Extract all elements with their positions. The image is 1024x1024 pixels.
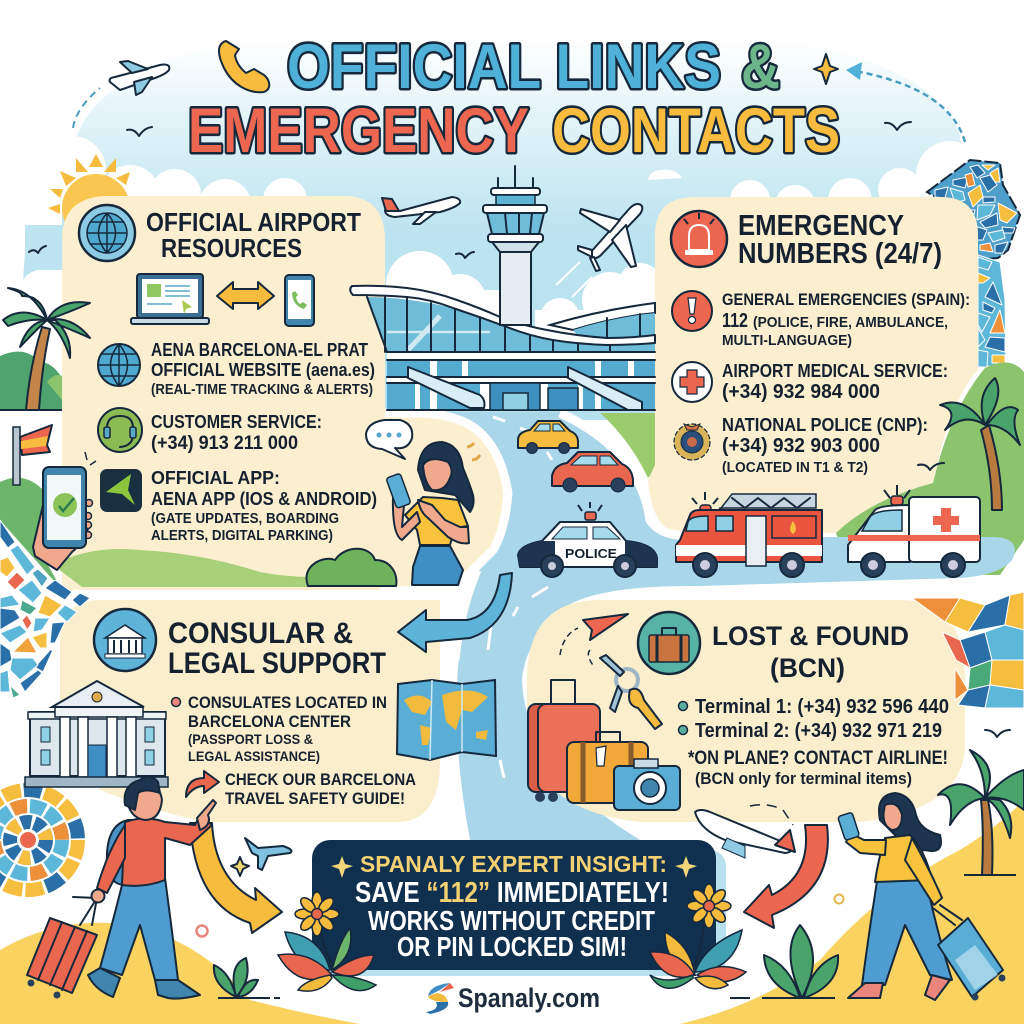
arrow: blue bbox=[398, 573, 512, 652]
heading: EMERGENCY bbox=[738, 210, 904, 242]
text: national police: NATIONAL POLICE (CNP): bbox=[722, 415, 928, 435]
icon: camera bbox=[614, 759, 680, 810]
text: check guide: CHECK OUR BARCELONA bbox=[225, 770, 416, 789]
logo: spanaly bbox=[426, 983, 600, 1014]
icon: orange suitcase bbox=[567, 732, 648, 803]
legs bbox=[100, 878, 178, 980]
illustration: woman with phone bbox=[386, 442, 480, 585]
icon: siren bbox=[671, 211, 727, 267]
bush bbox=[306, 549, 396, 586]
green wedge bbox=[600, 413, 655, 478]
icon: police car: POLICE bbox=[565, 546, 617, 561]
text: general emergencies: (POLICE, FIRE, AMBULANCE, bbox=[753, 314, 948, 331]
icon: speech bubble bbox=[366, 420, 412, 459]
icon: plane left of tower bbox=[382, 197, 460, 224]
phone bbox=[386, 473, 411, 508]
text: website: (REAL-TIME TRACKING & ALERTS) bbox=[151, 381, 373, 398]
sand: bottom right bbox=[680, 800, 1024, 1024]
text: customer service: (+34) 913 211 000 bbox=[151, 433, 298, 454]
bird near right palm bbox=[918, 463, 944, 470]
text: check guide bbox=[225, 770, 416, 808]
text: terminal numbers: Terminal 1: (+34) 932 596 440 bbox=[695, 696, 949, 718]
face bbox=[423, 459, 452, 490]
illustration: airport terminal bbox=[350, 286, 655, 410]
shirt bbox=[405, 497, 468, 545]
mosaic: right strip bbox=[978, 255, 1006, 367]
text: logo: Spanaly.com bbox=[458, 983, 600, 1013]
text: general emergencies bbox=[722, 290, 970, 349]
icon: exclamation bbox=[672, 291, 712, 331]
callout text: SAVE “112” IMMEDIATELY! bbox=[355, 877, 669, 909]
callout backing bbox=[324, 850, 726, 976]
illustration: right flower bbox=[650, 884, 746, 989]
icon: suitcase bbox=[638, 612, 700, 674]
icon: aena app bbox=[100, 469, 142, 512]
icon: small plane bbox=[110, 61, 169, 95]
torso bbox=[875, 835, 932, 882]
hair bbox=[879, 793, 941, 851]
icon: plane right of tower bbox=[556, 204, 642, 297]
ring decoration bbox=[196, 926, 208, 936]
arrow: yellow bbox=[190, 823, 282, 933]
icon: sparkle bbox=[814, 54, 838, 84]
text: website: OFFICIAL WEBSITE (aena.es) bbox=[151, 360, 375, 380]
text: terminal numbers: Terminal 2: (+34) 932 971 219 bbox=[695, 720, 942, 742]
text: consulates bbox=[188, 693, 387, 764]
text: national police: (+34) 932 903 000 bbox=[722, 435, 880, 457]
text: on plane note: *ON PLANE? CONTACT AIRLINE! bbox=[688, 748, 948, 769]
title: OFFICIAL LINKS bbox=[287, 31, 721, 102]
illustration: small blue plane bbox=[245, 838, 291, 870]
icon: headset bbox=[98, 408, 142, 452]
illustration: control tower bbox=[483, 166, 547, 325]
icon: red car bbox=[552, 452, 633, 492]
callout text: WORKS WITHOUT CREDIT bbox=[368, 905, 655, 936]
panel: consular background bbox=[60, 600, 440, 822]
meadow in resources panel bbox=[53, 549, 400, 587]
title: & bbox=[741, 31, 780, 102]
text: official app: ALERTS, DIGITAL PARKING) bbox=[151, 527, 333, 544]
panel: consular and legal support bbox=[25, 609, 496, 808]
rear hand bbox=[92, 890, 104, 902]
torso and arm bbox=[122, 815, 212, 886]
illustration: left flower bbox=[278, 892, 376, 991]
panel: lost and found background bbox=[527, 600, 965, 822]
icon: sparkle left bbox=[331, 856, 353, 878]
icon: flag bbox=[13, 425, 52, 485]
icon: world map bbox=[397, 680, 496, 760]
text: official app: AENA APP (IOS & ANDROID) bbox=[151, 489, 377, 509]
arm holding phone bbox=[393, 497, 420, 540]
icon: globe heading bbox=[79, 205, 135, 261]
legs bbox=[862, 875, 952, 985]
text: consulates: (PASSPORT LOSS & bbox=[188, 731, 313, 747]
bird bbox=[985, 730, 1010, 737]
text: website: AENA BARCELONA-EL PRAT bbox=[151, 340, 368, 360]
callout heading: SPANALY EXPERT INSIGHT: bbox=[360, 851, 667, 877]
text: general emergencies: MULTI-LANGUAGE) bbox=[722, 332, 852, 349]
icon: keys bbox=[600, 655, 662, 729]
icon: red luggage bbox=[528, 680, 600, 802]
decorative title arrows and birds bbox=[73, 62, 965, 258]
text: check guide: TRAVEL SAFETY GUIDE! bbox=[225, 789, 405, 808]
arm to suitcase bbox=[905, 838, 942, 905]
mosaic: left disc bbox=[0, 790, 78, 890]
text: on plane note bbox=[688, 748, 948, 788]
text: national police: (LOCATED IN T1 & T2) bbox=[722, 460, 868, 476]
icon: paper plane bbox=[560, 614, 628, 668]
icon: fire truck bbox=[676, 492, 822, 577]
icon: bank bbox=[94, 609, 156, 671]
heading: LEGAL SUPPORT bbox=[168, 647, 386, 680]
illustration: consulate building bbox=[25, 681, 168, 787]
icon: medical cross bbox=[672, 362, 712, 402]
illustration: walking woman with blue suitcase bbox=[834, 793, 1006, 1000]
text: national police bbox=[722, 415, 928, 476]
illustration: walking man with red suitcase bbox=[27, 776, 216, 999]
panel: emergency numbers bbox=[671, 210, 970, 476]
icon: phone bbox=[285, 275, 314, 326]
text: general emergencies: GENERAL EMERGENCIES (SPAIN): bbox=[722, 290, 970, 309]
illustration: left palm bbox=[3, 288, 90, 410]
small key decoration bbox=[834, 894, 844, 904]
heading bbox=[712, 621, 909, 683]
title: EMERGENCY bbox=[188, 95, 529, 166]
hair bbox=[418, 442, 474, 512]
text: consulates: LEGAL ASSISTANCE) bbox=[188, 748, 320, 764]
hand pointing bbox=[197, 800, 216, 830]
bullet bbox=[172, 698, 180, 706]
backpack bbox=[107, 820, 150, 885]
arm pointing bbox=[418, 500, 469, 543]
heading: RESOURCES bbox=[161, 233, 302, 263]
icon: double arrow bbox=[217, 282, 274, 309]
jeans bbox=[412, 546, 463, 585]
road bbox=[425, 412, 1015, 840]
illustration: right palm bbox=[940, 378, 1020, 510]
text: general emergencies: 112 bbox=[722, 310, 748, 332]
icon: title phone bbox=[219, 41, 269, 92]
heading: (BCN) bbox=[770, 653, 845, 683]
callout text: OR PIN LOCKED SIM! bbox=[397, 931, 627, 962]
left sky patch with bird bbox=[23, 226, 62, 280]
panel: official airport resources bbox=[79, 205, 377, 544]
arrow: red bbox=[744, 825, 828, 928]
icon: ambulance bbox=[848, 485, 980, 577]
text: official app: (GATE UPDATES, BOARDING bbox=[151, 510, 339, 527]
icon: red arrow bbox=[186, 771, 219, 797]
bullets bbox=[678, 702, 688, 734]
blue suitcase bbox=[933, 905, 1006, 1000]
phone bbox=[838, 812, 860, 841]
panel: official airport resources background bbox=[62, 196, 508, 590]
clouds bbox=[0, 120, 1024, 420]
heading bbox=[168, 617, 386, 680]
icon: globe website bbox=[98, 344, 140, 386]
left hills bbox=[0, 352, 62, 410]
icon: laptop bbox=[131, 274, 209, 324]
sand: bottom left bbox=[0, 923, 360, 1024]
mosaic: left bbox=[0, 520, 90, 698]
shoes bbox=[88, 968, 200, 999]
right hills bbox=[836, 362, 1024, 575]
illustration: palm bottom right bbox=[938, 750, 1024, 875]
illustration: hand with phone bbox=[33, 452, 96, 570]
text: consulates: BARCELONA CENTER bbox=[188, 712, 351, 731]
text: airport medical: (+34) 932 984 000 bbox=[722, 381, 880, 403]
text: consulates: CONSULATES LOCATED IN bbox=[188, 693, 387, 712]
heading: LOST & FOUND bbox=[712, 621, 909, 651]
illustration: cars bbox=[518, 421, 980, 577]
text: official app: OFFICIAL APP: bbox=[151, 468, 280, 488]
heading bbox=[738, 210, 942, 270]
illustration: plant bottom right bbox=[730, 925, 838, 998]
text: customer service bbox=[151, 412, 322, 454]
illustration: plant bottom left bbox=[214, 958, 280, 998]
text: website bbox=[151, 340, 375, 398]
green left meadow bbox=[0, 478, 62, 590]
callout: expert insight bbox=[312, 840, 716, 970]
road edge strokes bbox=[380, 413, 690, 778]
head bbox=[125, 776, 162, 820]
small marks bbox=[467, 443, 480, 460]
heading: CONSULAR & bbox=[168, 617, 353, 650]
icon: sparkle right bbox=[675, 856, 697, 878]
heading: NUMBERS (24/7) bbox=[738, 238, 942, 270]
mosaic: top right bbox=[927, 160, 1020, 260]
title: CONTACTS bbox=[552, 95, 840, 166]
text: on plane note: (BCN only for terminal items) bbox=[695, 769, 912, 788]
text: airport medical: AIRPORT MEDICAL SERVICE: bbox=[722, 361, 948, 381]
icon: mid right plane bbox=[695, 805, 795, 858]
heading: OFFICIAL AIRPORT bbox=[146, 207, 361, 237]
face bbox=[884, 804, 902, 830]
callout text bbox=[355, 877, 669, 962]
title bbox=[188, 31, 840, 166]
panel: emergency numbers background bbox=[648, 197, 978, 533]
icon: sun bbox=[48, 154, 130, 242]
text: customer service: CUSTOMER SERVICE: bbox=[151, 412, 322, 432]
icon: sparkle near plane bbox=[231, 857, 249, 876]
panel: lost and found bbox=[528, 612, 949, 810]
icon: spanaly mark bbox=[426, 983, 454, 1014]
rear arm bbox=[97, 825, 125, 893]
text: official app bbox=[151, 468, 377, 544]
icon: yellow car bbox=[518, 421, 578, 454]
shoes bbox=[848, 975, 950, 1000]
text: airport medical bbox=[722, 361, 948, 403]
arm to phone bbox=[846, 833, 886, 855]
mosaic: right lower bbox=[912, 592, 1024, 708]
text: terminal numbers bbox=[695, 696, 949, 742]
background: sky bbox=[0, 40, 962, 420]
heading bbox=[146, 207, 361, 263]
icon: police badge bbox=[674, 424, 710, 460]
red suitcase bbox=[27, 897, 97, 998]
icon: police car bbox=[518, 502, 657, 577]
